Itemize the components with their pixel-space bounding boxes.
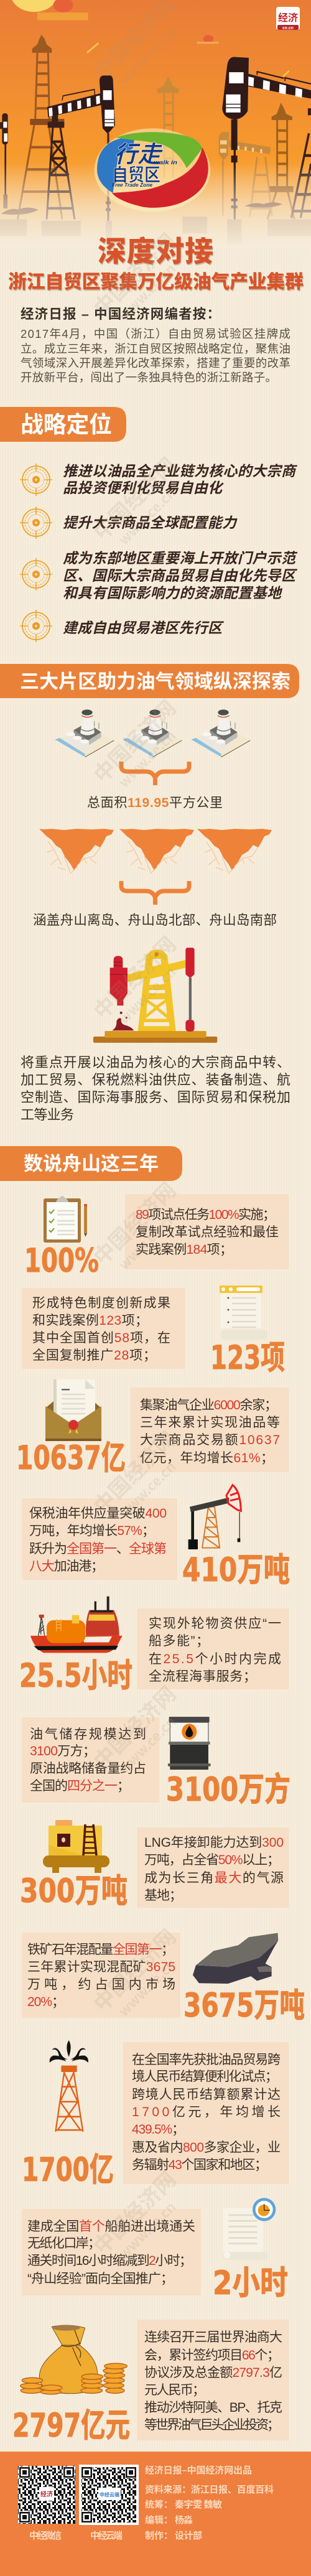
text block: 等世界油气巨头企业投资； xyxy=(144,2418,280,2432)
watermarks: www.ce.cn xyxy=(114,726,180,791)
QR captions: 中经微信 xyxy=(29,2529,62,2542)
title: 浙江自贸区聚集万亿级油气产业集群 xyxy=(8,266,304,294)
logo: 行走自贸区 walk in Free Trade Zone: 行走 xyxy=(114,142,164,168)
watermarks: 中国经济网 xyxy=(85,2163,182,2260)
section heading: 战略定位: 战略定位 xyxy=(21,406,112,439)
section heading: 数说舟山这三年 xyxy=(0,1146,182,1181)
text block xyxy=(22,2209,201,2295)
text block: 境人民币结算便利化试点； xyxy=(132,2070,278,2084)
text block xyxy=(137,1608,289,1689)
watermarks: 中国经济网 xyxy=(85,1921,182,2017)
panel: 410万吨 xyxy=(22,1485,290,1589)
panel: 2797亿元 xyxy=(12,2320,289,2445)
text block: 在25.5个小时内完成 xyxy=(149,1652,281,1666)
credits: 编辑： xyxy=(145,2513,173,2526)
text block: 通关时间16小时缩减到2小时； xyxy=(27,2254,192,2268)
right dark tower xyxy=(291,133,311,218)
logo: Economic Daily ce.cn badge xyxy=(276,7,300,30)
credits: 杨淼 xyxy=(175,2513,193,2526)
editor's note: 2017年4月，中国（浙江）自由贸易试验区挂牌成 xyxy=(21,327,290,340)
text block: 跨境人民币结算额累计达 xyxy=(132,2088,281,2102)
credits: 设计部 xyxy=(175,2529,202,2542)
text block: 基地； xyxy=(144,1888,182,1903)
text block: 复制改革试点经验和最佳 xyxy=(136,1225,279,1239)
text: item 4: 建成自由贸易港区先行区 xyxy=(63,620,225,636)
watermarks: www.ce.cn xyxy=(114,1457,180,1523)
section heading: 战略定位 xyxy=(0,406,126,442)
text: industries: 将重点开展以油品为核心的大宗商品中转、 xyxy=(21,1055,290,1070)
text: industries xyxy=(21,1055,290,1122)
watermarks: 中国经济网 xyxy=(85,449,182,546)
text: coverage: 涵盖舟山离岛、舟山岛北部、舟山岛南部 xyxy=(33,913,277,928)
icon: gushing derrick xyxy=(50,2040,88,2132)
left background derrick xyxy=(17,35,64,220)
text block: 三年累计实现混配矿3675 xyxy=(27,1960,175,1974)
stat: 1700亿 xyxy=(22,2151,114,2189)
text block: 连续召开三届世界油商大 xyxy=(144,2330,282,2345)
icons: three Zhoushan maps xyxy=(39,829,272,874)
text block: 集聚油气企业6000余家； xyxy=(140,1398,277,1412)
QR code: cloud app: 中经云端 xyxy=(100,2491,119,2498)
QR captions xyxy=(29,2529,123,2542)
stat: 123项 xyxy=(210,1339,285,1377)
ground scrub xyxy=(1,202,282,215)
QR captions: 中经云端 xyxy=(90,2529,123,2542)
text: item 1: 品投资便利化贸易自由化 xyxy=(63,480,224,496)
editor's note: 气领域深入开展差异化改革探索，搭建了重要的改革 xyxy=(21,357,290,370)
text block: 船多能”； xyxy=(149,1634,209,1648)
text block: 元人民币； xyxy=(144,2383,205,2397)
stat: 2小时 xyxy=(213,2264,288,2302)
small left pumpjack xyxy=(0,113,8,208)
text: item 3: 成为东部地区重要海上开放门户示范 xyxy=(63,550,298,566)
back centre derrick xyxy=(157,77,179,178)
text: item 3 xyxy=(63,550,298,601)
text block xyxy=(137,2320,289,2440)
text block xyxy=(22,1288,185,1369)
text block: 其中全国首创58项，在 xyxy=(32,1331,170,1345)
icon: target 1 xyxy=(20,464,52,496)
QR code: WeChat: 经济 xyxy=(40,2490,53,2498)
icon: money bag and coins xyxy=(21,2325,127,2394)
stat: 10637亿 xyxy=(16,1439,126,1477)
credits: 资料来源：浙江日报、百度百科 xyxy=(145,2483,274,2496)
panel: 3675万吨 xyxy=(22,1933,305,2025)
watermarks: www.ce.cn xyxy=(114,1208,180,1274)
icon: pumpjack xyxy=(93,948,217,1043)
panel: 100% xyxy=(24,1194,289,1280)
title xyxy=(8,229,304,294)
text: industries: 加工贸易、保税燃料油供应、装备制造、航 xyxy=(21,1072,290,1088)
text block: 原油战略储备量约占 xyxy=(30,1762,146,1776)
logo: 行走自贸区 walk in Free Trade Zone: walk in xyxy=(154,159,178,166)
section heading: 三大片区: 三大片区助力油气领域纵深探索 xyxy=(20,666,290,694)
icon: iron ore xyxy=(193,1933,278,1984)
icon: target 3 xyxy=(20,558,52,590)
text: item 3: 区、国际大宗商品贸易自由化先导区 xyxy=(63,567,298,584)
panel: 10637亿 xyxy=(16,1379,289,1477)
watermarks: www.ce.cn xyxy=(114,1954,180,2020)
text block xyxy=(125,1194,289,1269)
text block xyxy=(137,1827,289,1908)
section heading: 数说舟山这三年: 数说舟山这三年 xyxy=(24,1148,159,1176)
watermarks: www.ce.cn xyxy=(114,22,180,88)
text block: 建成全国首个船舶进出境通关 xyxy=(27,2219,195,2234)
text block xyxy=(22,1498,177,1580)
credits: 制作： xyxy=(145,2529,173,2542)
text block: 务辐射43个国家和地区； xyxy=(132,2158,267,2172)
text block: 万吨，年均增长57%； xyxy=(29,1524,155,1538)
icons: three refineries xyxy=(55,709,250,757)
text block: 跃升为全国第一、全球第 xyxy=(29,1542,167,1556)
text: total area: 总面积119.95平方公里 xyxy=(87,796,223,810)
right pumpjack xyxy=(222,57,311,220)
text block: 万吨，占全省50%以上； xyxy=(144,1853,280,1867)
text block: 全流程海事服务； xyxy=(149,1669,256,1684)
icon: document with clock xyxy=(223,2198,276,2260)
text block: 形成特色制度创新成果 xyxy=(32,1296,170,1310)
watermarks: www.ce.cn xyxy=(114,2197,180,2263)
watermarks: 中国经济网 xyxy=(85,225,182,322)
icon: target 4 xyxy=(20,610,52,642)
watermarks: www.ce.cn xyxy=(114,962,180,1028)
watermarks xyxy=(85,0,193,2272)
editor's note xyxy=(21,307,290,384)
watermarks: 中国经济网 xyxy=(85,692,182,788)
logo: Economic Daily ce.cn badge: 经济 xyxy=(278,12,298,24)
panel: 123项 xyxy=(22,1286,285,1377)
text block: 20%； xyxy=(27,1995,65,2009)
text block: 会，累计签约项目66个； xyxy=(144,2348,280,2363)
text block xyxy=(123,2042,289,2184)
text block: 铁矿石年混配量全国第一； xyxy=(27,1943,174,1957)
right background derrick xyxy=(267,103,294,220)
text block: 实践案例184项； xyxy=(136,1243,233,1257)
text block: 协议涉及总金额2797.3亿 xyxy=(144,2366,282,2380)
text block: 推动沙特阿美、BP、托克 xyxy=(144,2401,282,2415)
watermarks: www.ce.cn xyxy=(114,259,180,325)
text block xyxy=(22,1933,180,2018)
text block: 三年来累计实现油品等 xyxy=(140,1416,280,1430)
credits: 统筹： xyxy=(145,2498,173,2511)
logo: 行走自贸区 walk in Free Trade Zone: Free Trade Zone xyxy=(112,182,153,188)
text: item 1 xyxy=(63,463,298,496)
QR code: cloud app xyxy=(79,2465,139,2525)
left pumpjack xyxy=(47,75,115,222)
footer xyxy=(0,2452,311,2576)
text block: 实现外轮物资供应“一 xyxy=(149,1617,281,1631)
text block xyxy=(131,1388,289,1472)
icon: envelope xyxy=(45,1379,101,1441)
panel: 300万吨 xyxy=(20,1820,289,1910)
text: item 1: 推进以油品全产业链为核心的大宗商 xyxy=(63,463,298,479)
text block: 3100万方； xyxy=(30,1744,96,1758)
text block: 惠及省内800多家企业，业 xyxy=(132,2140,281,2155)
credits: 秦宇雯 魏敏 xyxy=(175,2498,222,2511)
text block: “舟山经验”面向全国推广； xyxy=(27,2272,174,2286)
panel: strategic positioning list xyxy=(20,463,298,642)
credits: 经济日报–中国经济网出品 xyxy=(145,2463,252,2476)
header illustration: oil field at sunset xyxy=(0,0,311,249)
watermarks: 中国经济网 xyxy=(85,1678,182,1775)
panel: 3100万方 xyxy=(22,1717,290,1809)
text block: 在全国率先获批油品贸易跨 xyxy=(132,2053,281,2067)
panel: 1700亿 xyxy=(22,2040,289,2189)
panel: 2小时 xyxy=(22,2198,288,2302)
watermarks: 中国经济网 xyxy=(85,1423,182,1519)
text block: 亿元，年均增长61%； xyxy=(140,1451,274,1465)
title: 深度对接 xyxy=(98,229,213,270)
icon: oil barrel xyxy=(168,1717,211,1770)
text block: 保税油年供应量突破400 xyxy=(29,1506,167,1521)
logo: 行走自贸区 walk in Free Trade Zone xyxy=(95,128,210,212)
stat: 25.5小时 xyxy=(19,1657,132,1695)
QR code: WeChat xyxy=(18,2466,75,2524)
watermarks: 中国经济网 xyxy=(85,928,182,1025)
text block: 大宗商品交易额10637 xyxy=(140,1433,280,1447)
text block: 全国复制推广28项； xyxy=(32,1348,156,1363)
text block: 万吨，约占国内市场 xyxy=(27,1977,175,1992)
logo: Economic Daily ce.cn badge: ce.cn xyxy=(282,26,294,30)
text block: 无纸化口岸； xyxy=(27,2236,101,2251)
text block: 油气储存规模达到 xyxy=(30,1727,146,1742)
text block: 和实践案例123项； xyxy=(32,1314,148,1328)
editor's note: 经济日报 – 中国经济网编者按： xyxy=(21,307,220,322)
watermarks: 中国经济网 xyxy=(85,1174,182,1271)
icon: pumpjack xyxy=(188,1485,241,1549)
icon: tanker ship xyxy=(30,1597,123,1653)
stat: 2797亿元 xyxy=(12,2407,130,2445)
icon: target 2 xyxy=(20,506,52,539)
watermarks: www.ce.cn xyxy=(114,483,180,549)
text block xyxy=(22,1717,159,1803)
text block: 1700亿元，年均增长 xyxy=(132,2105,281,2119)
brace xyxy=(121,762,189,785)
stat: 100% xyxy=(24,1242,99,1280)
text block: LNG年接卸能力达到300 xyxy=(144,1836,284,1850)
logo: 行走自贸区 walk in Free Trade Zone: 自贸区 xyxy=(112,165,160,185)
editor's note: 立。成立三年来，浙江自贸区按照战略定位，聚焦油 xyxy=(21,342,290,355)
text: industries: 工等业务 xyxy=(21,1107,74,1122)
editor's note: 开放新平台，闯出了一条独具特色的浙江新路子。 xyxy=(21,371,277,384)
text: industries: 空制造、国际海事服务、国际贸易和保税加 xyxy=(21,1090,290,1105)
icon: scroll xyxy=(220,1286,267,1340)
panel: 25.5小时 xyxy=(19,1597,289,1695)
text block: 成为长三角最大的气源 xyxy=(144,1871,284,1885)
credits xyxy=(145,2463,274,2542)
icon: clipboard xyxy=(44,1196,87,1243)
text: item 2: 提升大宗商品全球配置能力 xyxy=(63,515,238,531)
text: item 3: 和具有国际影响力的资源配置基地 xyxy=(63,585,283,601)
text block: 八大加油港； xyxy=(29,1559,104,1574)
text block: 全国的四分之一； xyxy=(30,1779,130,1793)
stat: 300万吨 xyxy=(20,1872,128,1910)
brace xyxy=(121,881,189,905)
watermarks: www.ce.cn xyxy=(114,1712,180,1778)
icon: storage tank xyxy=(43,1820,109,1873)
text block: 89项试点任务100%实施； xyxy=(136,1208,276,1222)
back pumpjack xyxy=(219,132,272,217)
text block: 439.5%； xyxy=(132,2122,185,2137)
